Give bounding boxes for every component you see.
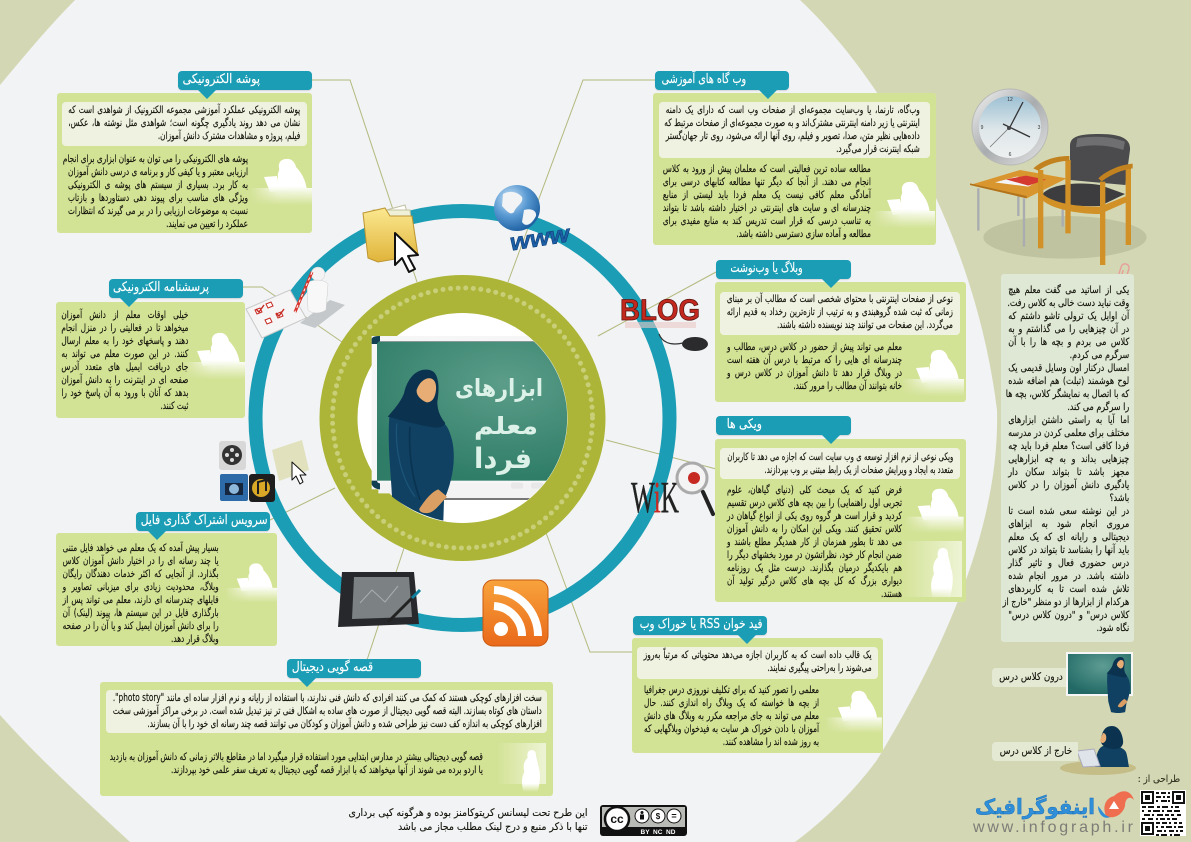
body text: عملکرد را تعیین می نمایند. <box>166 219 248 230</box>
definition text <box>727 292 953 331</box>
body text: بدهد که آنان با ورود به آن پاسخ خود را <box>61 388 188 399</box>
definition text: زمانی که ثبت شده گروهبندی و به ترتیب از تازه‌ترین رخداد به قدیم ارائه <box>727 307 953 318</box>
introduction text: هرکدام از ابزارها از دو منظر "خارج از <box>1002 597 1129 608</box>
body text: به تناسب درسی که قرار است تدریس کند به منابع مفیدی برای <box>663 216 871 227</box>
introduction text: یکی از اساتید می گفت معلم هیچ <box>1008 285 1129 296</box>
body text <box>110 750 483 776</box>
tab pointer <box>822 435 840 444</box>
introduction text: کلاس می بردم و بچه ها را با آن <box>1008 337 1129 348</box>
body text: مطالعه و آماده سازی دسترسی داشته باشد. <box>736 229 871 240</box>
teal outer ring <box>256 211 670 625</box>
body text: یا اردو برده می شوند از آنها میخواهند که با ابزار قصه گویی دیجیتال به تعریف سفر علمی خود بپردازند. <box>171 765 483 776</box>
icon: blog <box>620 294 708 351</box>
heading tab <box>287 659 421 678</box>
introduction text: وقت نباید دست خالی به کلاس رفت. <box>1007 298 1129 309</box>
panel body <box>715 282 966 402</box>
introduction text: تلاش شده است تا به کاربردهای <box>1008 584 1129 595</box>
definition box <box>720 292 960 335</box>
body text: را برای دانش آموزان ایمیل کند و یا آن را در صفحه <box>63 621 219 632</box>
infograph logo <box>972 791 1134 836</box>
icon: small teacher at laptop <box>1060 726 1136 775</box>
tab pointer <box>759 90 777 99</box>
body text: کلاس تحقیق کنند. ویکی این امکان را به دانش آموزان <box>727 524 902 535</box>
body text: هستند. <box>881 589 902 600</box>
body text: بگذارد. از آنجایی که اکثر خدمات دهندگان رایگان <box>63 569 219 580</box>
definition text: داده‌هایی نظیر متن، صدا، تصویر و فیلم، روی آنها ارائه می‌شود، روی تار جهان‌گستر <box>666 131 920 142</box>
silhouette icon <box>253 158 312 204</box>
body text: از بچه ها خواسته که یک وبلاگ راه اندازی کنند. حال <box>644 698 819 709</box>
introduction text: آن اوایل یک ترولی تاشو داشتم که <box>1008 311 1129 322</box>
body text: معلم می تواند پیش از حضور در کلاس درس، مطالب و <box>727 342 902 353</box>
introduction text: دیجیتالی و رایانه ای که یک معلم <box>1008 532 1129 543</box>
introduction text: که با اتصال به نمایشگر کلاس، بچه ها <box>1006 389 1129 400</box>
definition text <box>727 452 953 476</box>
body text: خانه بتوانند آن مطالب را مرور کنند. <box>793 381 902 392</box>
definition text: اینترنتی یا زیر دامنه اینترنتی مشترک‌اند و به صورت مجموعه‌ای از صفحات مرتبط که <box>665 118 920 129</box>
definition text: نشان می دهد روند یادگیری چگونه است؛ شواهدی مثل نوشته ها، عکس، <box>68 118 300 129</box>
body text: ارزیابی معتبر و یا کیفی کار و برنامه ی درسی دانش آموزان <box>68 167 248 178</box>
body text: به روز شده اند را مشاهده کنند. <box>723 737 819 748</box>
connector lines <box>243 80 720 660</box>
silhouette icon <box>876 182 935 226</box>
icon: wall clock: 9 <box>981 125 984 131</box>
body text: ویژگی های مناسب برای پیوند دهی دستاوردها و بازتاب <box>68 193 248 204</box>
chalk title: معلم <box>474 412 538 440</box>
silhouette icon <box>186 332 245 378</box>
silhouette icon <box>828 690 882 732</box>
introduction text: داشته باشد. در مرور انجام شده <box>1008 571 1129 582</box>
heading tab <box>633 616 767 635</box>
panel body <box>715 439 966 602</box>
license text <box>349 806 588 833</box>
panel body <box>56 533 277 646</box>
body text: هم بایکدیگر درمیان بگذارند. درست مثل یک روزنامه <box>727 563 902 574</box>
introduction text: سرگرم می کردم. <box>1069 350 1129 361</box>
panel: digital storytelling <box>100 659 553 796</box>
body text: یا چند رسانه ای را در اختیار دانش آموزان کلاس <box>63 556 219 567</box>
body text <box>62 541 219 645</box>
license text: تنها با ذکر منبع و درج لینک مطلب مجاز می باشد <box>398 821 588 833</box>
panel: file sharing <box>56 512 277 646</box>
tab pointer <box>298 678 316 687</box>
heading: پوشه الکترونیکی <box>183 72 260 87</box>
olive inner ring <box>332 288 592 548</box>
body text: به کار برد. بسیاری از سیستم های پوشه ی الکترونیکی <box>68 180 248 191</box>
definition text: شبکه اینترنت قرار می‌گیرد. <box>836 144 920 155</box>
body text: فرض کنید که یک مبحث کلی (دنیای گیاهان، علوم <box>727 485 902 496</box>
icon: rss <box>483 580 548 646</box>
introduction text: لوح هوشمند (تبلت) هم اضافه شده <box>1008 376 1129 387</box>
body text: وبلاگ قرار دهد. <box>171 634 219 645</box>
definition text: فیلم، پروژه و مشاهدات مشترک دانش آموزان. <box>158 131 300 142</box>
heading: فید خوان RSS یا خوراک وب <box>639 617 762 632</box>
panel body <box>100 682 553 796</box>
introduction text: باید آنها را بشناسد تا بتواند در کلاس <box>1008 545 1129 556</box>
body text <box>644 685 820 748</box>
silhouette icon <box>228 563 277 601</box>
panel body <box>632 638 883 753</box>
designed by label: طراحی از : <box>1138 774 1180 785</box>
legend: outside classroom <box>992 742 1078 761</box>
designer qr code <box>1140 790 1186 836</box>
chalk title <box>455 374 543 475</box>
creative commons badge <box>600 805 687 836</box>
icon: shared files <box>219 440 309 502</box>
definition text: یک قالب داده است که به کاربران اجازه می‌دهد محتویاتی که مرتباً به‌روز <box>644 650 872 661</box>
definition text: پوشه الکترونیکی عملکرد آموزشی مجموعه الکترونیک از شواهدی است که <box>68 105 300 116</box>
icon: wiki with magnifier: WiK <box>631 473 679 522</box>
introduction text <box>1002 284 1130 634</box>
icon: blog: BLOG <box>620 294 700 327</box>
body text: تجربی اول راهنمایی) را بین بچه های کلاس درس تقسیم <box>727 498 902 509</box>
panel body <box>56 302 245 418</box>
body text: آمادگی معلم کافی نیست یک معلم فردا باید لیستی از منابع <box>663 190 871 201</box>
introduction text: نگاه شود. <box>1096 623 1129 634</box>
definition text: داستان های کوتاه بسازند. البته قصه گویی دیجیتال از صورت های ساده به اشکال فنی تر نیز تبدیل شده است. در برخی مراکز آموزشی سخت <box>113 706 542 717</box>
chalkboard with teacher <box>372 336 568 521</box>
body text: آموزان با دادن خوراک هر سایت به فیدخوان وبلاگهایی که <box>644 724 819 735</box>
definition text <box>113 692 542 730</box>
standing silhouette icon <box>504 743 546 791</box>
definition text: ویکی نوعی از نرم افزار توسعه ی وب سایت است که اجازه می دهد تا کاربران <box>727 452 953 463</box>
legend: inside classroom <box>992 668 1066 687</box>
tab pointer <box>148 531 166 540</box>
panel: e-portfolio <box>57 71 312 233</box>
icon: paperclip <box>1116 263 1130 285</box>
body text: بارگذاری فایل در این سیستم ها، پیوند (لینک) آن <box>63 608 219 619</box>
definition text: متعدد به ایجاد و ویرایش صفحات از یک رابط مبتنی بر وب بپردازند. <box>764 465 953 476</box>
icon: wall clock <box>972 89 1048 165</box>
definition text: می‌شوند را به‌راحتی پیگیری نمایند. <box>768 663 872 674</box>
body text: پوشه های الکترونیکی را می توان به عنوان ابزاری برای انجام <box>63 154 248 165</box>
body text: فایلهای چندرسانه ای دارند، معلم می تواند پس از <box>63 595 219 606</box>
heading: پرسشنامه الکترونیکی <box>113 280 209 295</box>
body text: بسیار پیش آمده که یک معلم می خواهد فایل متنی <box>63 543 219 554</box>
body text: چندرسانه ای هایی را که مرتبط با درس آن هفته است <box>727 355 902 366</box>
tab pointer <box>822 279 840 288</box>
introduction text: فردا کافی است؟ معلم فردا باید چه <box>1008 441 1129 452</box>
definition box <box>637 647 878 679</box>
standing silhouette icon <box>908 541 962 597</box>
chalk title: ابزارهای <box>455 374 543 402</box>
definition text <box>664 104 920 155</box>
definition text <box>643 648 872 674</box>
introduction text: کلاس درس" و "درون کلاس درس" <box>1008 610 1129 621</box>
legend label: خارج از کلاس درس <box>1000 745 1072 757</box>
heading tab <box>716 416 851 435</box>
introduction text: را سرگرم می کند. <box>1067 402 1129 413</box>
icon: wiki with magnifier <box>631 463 713 522</box>
heading tab <box>655 71 789 90</box>
body text: ثبت کنند. <box>160 401 188 412</box>
icon: wall clock: 6 <box>1009 152 1012 158</box>
heading: قصه گویی دیجیتال <box>292 660 373 675</box>
creative commons badge: $ <box>656 812 661 821</box>
panel: introduction <box>1001 274 1134 642</box>
icon: globe www <box>494 185 573 257</box>
icon: wall clock: 3 <box>1038 125 1041 131</box>
definition text: وب‌گاه، تارنما، یا وب‌سایت مجموعه‌ای از صفحات وب است که دارای یک دامنه <box>666 105 920 116</box>
definition text: سخت افزارهای کوچکی هستند که کمک می کنند افرادی که دانش فنی ندارند، با استفاده از رایانه و نرم افزار ساده ای مانند "photo story". <box>113 693 542 704</box>
body text <box>726 484 902 600</box>
body text <box>61 308 188 412</box>
body text <box>63 154 248 230</box>
panel: educational websites <box>653 70 936 245</box>
license text: این طرح تحت لیسانس کریتوکامنز بوده و هرگونه کپی برداری <box>349 807 588 819</box>
tab pointer <box>120 298 138 307</box>
body text: کردید و قرار است هر گروه روی یکی از انواع گیاهان در <box>727 511 902 522</box>
introduction text: مروری انجام شود به ابزاهای <box>1008 519 1129 530</box>
body text: صفحه ای در اینترنت را به دانش آموزان <box>61 375 188 386</box>
infograph logo: www.infograph.ir <box>972 819 1134 836</box>
body text: قصه گویی دیجیتالی بیشتر در مدارس ابتدایی مورد استفاده قرار میگیرد اما در مقاطع بالاتر زمانی که دانش آموزان به بازدید <box>110 752 483 763</box>
heading: وب گاه های آموزشی <box>662 72 746 87</box>
body text: کنند. در این صورت معلم می تواند به <box>61 349 188 360</box>
heading: سرویس اشتراک گذاری فایل <box>140 513 267 528</box>
body text: میخواهد تا در فعالیتی را در منزل انجام <box>61 323 188 334</box>
silhouette icon <box>905 350 964 394</box>
creative commons badge: BY NC ND <box>641 829 676 836</box>
icon: folder with cursor <box>363 205 418 272</box>
silhouette icon <box>907 488 964 532</box>
introduction text: مختلف برای معلمی کردن در مدرسه <box>1008 428 1129 439</box>
panel: wiki <box>715 416 966 602</box>
icon: small teacher at board <box>1066 652 1133 713</box>
body text <box>726 342 902 392</box>
body text: نسبت به موضوعات ارزیابی را در بر می گیرند که انتظارات <box>68 206 248 217</box>
body text: معلمی را تصور کنید که برای تکلیف نوروزی درس جغرافیا <box>644 685 819 696</box>
panel: e-questionnaire <box>56 279 245 418</box>
body text: چندرسانه ای و سایت های اینترنتی در اختیار داشته باشد تا بتواند <box>663 203 871 214</box>
definition box <box>106 690 547 733</box>
panel body <box>57 93 312 233</box>
body text <box>663 164 872 240</box>
creative commons badge: cc <box>610 812 624 826</box>
legend label: درون کلاس درس <box>999 671 1063 683</box>
introduction text: درس حضوری فعال و تاثیر گذار <box>1008 558 1129 569</box>
body text: معلم می تواند به جای مراجعه مکرر به وبلاگ های دانش <box>644 711 819 722</box>
icon: questionnaire <box>246 267 345 338</box>
heading tab <box>109 279 243 298</box>
definition text <box>68 103 300 142</box>
body text: در وبلاگ قرار دهد تا دانش آموزان در کلاس درس و <box>727 368 902 379</box>
panel body <box>653 93 936 245</box>
icon: table and chair <box>970 134 1147 265</box>
introduction text: باشد؟ <box>1109 493 1129 504</box>
chalk title: فردا <box>474 442 532 475</box>
body text: ضمن انجام کار خود، نظراتشون در مورد بخشهای دیگر را <box>727 550 902 561</box>
creative commons badge: = <box>671 811 677 821</box>
introduction text: در آن چیزهایی را می گذاشتم و به <box>1008 324 1129 335</box>
body text: انجام می دهند. از آنجا که دیگر تنها مطالعه کتابهای درسی برای <box>663 177 871 188</box>
heading tab <box>178 71 312 90</box>
body text: می دهد تا بطور همزمان از کار همدیگر مطلع باشند و <box>727 537 902 548</box>
tab pointer <box>198 90 216 99</box>
tab pointer <box>738 635 756 644</box>
definition text: نوعی از صفحات اینترنتی با محتوای شخصی است که مطالب آن بر مبنای <box>727 294 953 305</box>
heading tab <box>136 512 270 531</box>
introduction text: امسال درکنار اون وسایل قدیمی یک <box>1008 363 1129 374</box>
panel: blog <box>715 260 966 402</box>
introduction text: در این نوشته سعی شده است تا <box>1008 506 1129 517</box>
icon: graphic tablet <box>338 572 420 627</box>
body text: خیلی اوقات معلم از دانش آموزان <box>61 310 188 321</box>
heading: ویکی ها <box>727 417 762 432</box>
infograph logo: اینفوگرافیک <box>975 794 1095 819</box>
definition text: می‌گردد. این صفحات می توانند چند نویسنده داشته باشند. <box>777 320 953 331</box>
body text: وبلاگ، محدودیت زیادی برای میزبانی تصاویر و <box>63 582 219 593</box>
body text: دهند و پاسخهای خود را به معلم ارسال <box>61 336 188 347</box>
definition box <box>62 102 307 146</box>
introduction text: چیزهایی بداند و به چه ابزارهایی <box>1008 454 1129 465</box>
heading: وبلاگ یا وب‌نوشت <box>731 261 803 276</box>
introduction text: اما آیا به راستی داشتن ابزارهای <box>1008 415 1129 426</box>
introduction text: مجهز باشد تا بتواند سکان دار <box>1008 467 1129 478</box>
body text: دیواری بزرگ که کل بچه های کلاس درگیر تولید آن <box>727 576 902 587</box>
heading tab <box>716 260 851 279</box>
teacher figure <box>388 370 454 521</box>
definition box <box>659 102 930 158</box>
introduction text: یادگیری دانش آموزان را در کلاس <box>1008 480 1129 491</box>
definition text: افزارهای کوچکی به اندازه کف دست نیز طراحی شده و دانش آموزان و کودکان می توانند قصه چند رسانه ای خود را با آن بسازند. <box>148 719 542 730</box>
definition box <box>720 448 960 479</box>
icon: wall clock: 12 <box>1007 97 1013 103</box>
icon: globe www: www <box>508 220 573 257</box>
body text: جای دریافت ایمیل های متعدد آدرس <box>61 362 188 373</box>
panel: rss feed reader <box>632 616 883 753</box>
body text: مطالعه ساده ترین فعالیتی است که معلمان پیش از ورود به کلاس <box>663 164 871 175</box>
